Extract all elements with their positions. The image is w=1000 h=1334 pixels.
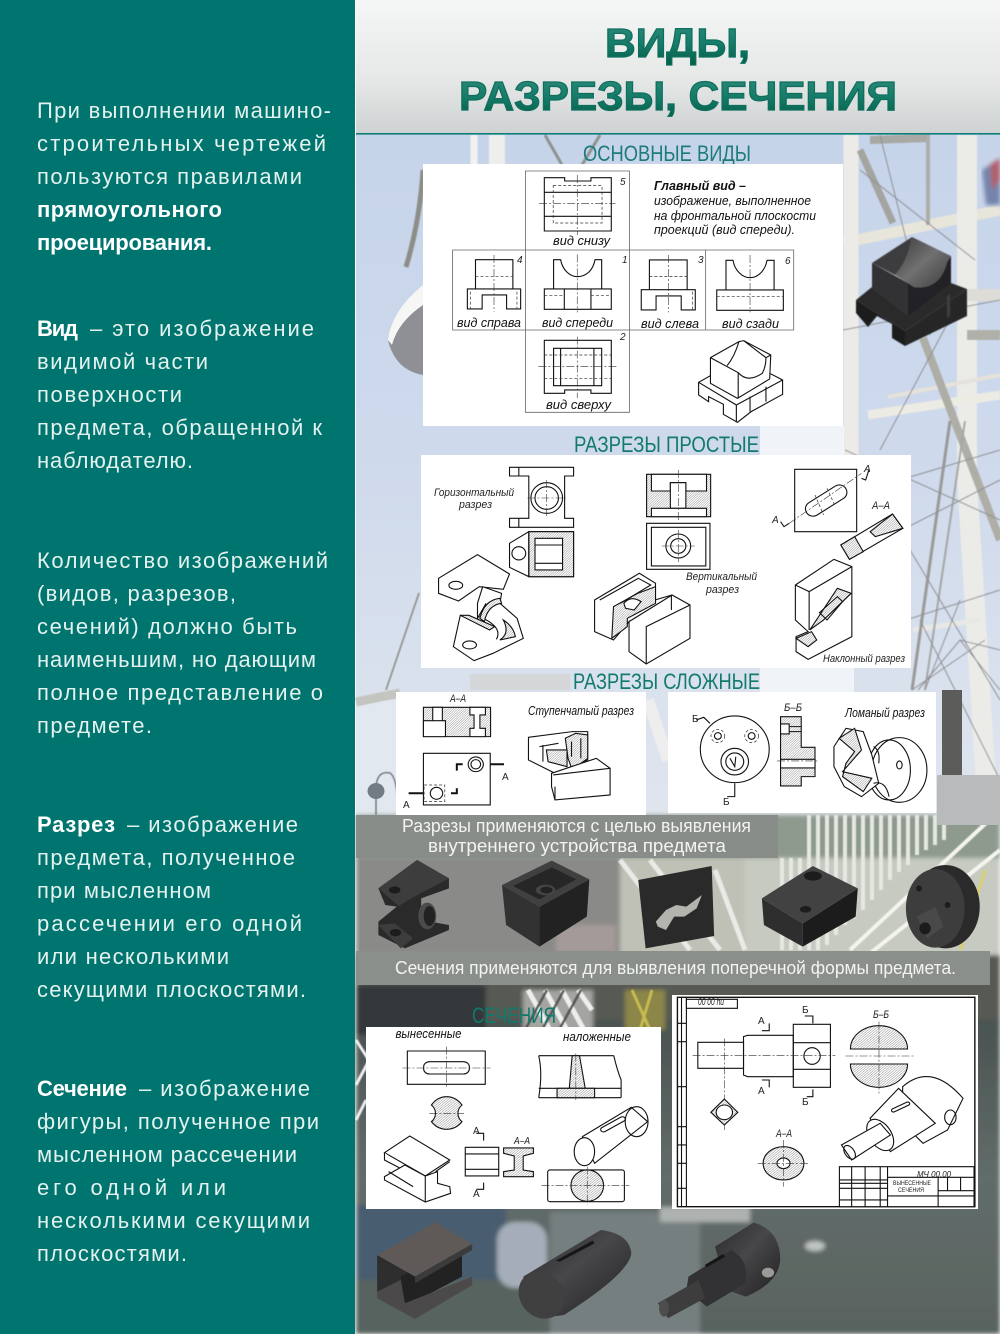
view labels: вид справа: [457, 316, 521, 330]
sidebar text: definition of cut: Разрез: [37, 812, 115, 837]
stepped cut captions: Ступенчатый разрез: [528, 704, 634, 718]
heading: main views: ОСНОВНЫЕ ВИДЫ: [583, 141, 751, 166]
cut captions: А–А: [871, 500, 890, 512]
callout: main view definition: Главный вид –: [654, 179, 746, 193]
sidebar text: definition of cut: рассечении его одной: [37, 911, 302, 936]
sidebar text: number of images: наименьшим, но дающим: [37, 647, 316, 672]
sheet captions: МЧ 00.00: [917, 1170, 952, 1179]
sidebar text: definition of view: – это изображение: [90, 316, 314, 341]
callout: main view definition: [654, 179, 816, 237]
caption bar: purpose of cuts: [356, 815, 778, 858]
icon: I-beam: [377, 1222, 472, 1319]
drawing: removed and overlaid sections: [384, 1047, 648, 1205]
broken cut captions: Б–Б: [784, 702, 802, 714]
icon: part 5: [906, 865, 980, 948]
title: [459, 20, 897, 119]
sidebar text: projection rule: пользуются правилами: [37, 164, 302, 189]
sidebar text: definition of view: поверхности: [37, 382, 182, 407]
cut captions: Горизонтальный: [434, 487, 514, 499]
sidebar text: definition of section: Сечение: [37, 1076, 127, 1101]
cut captions: [434, 464, 905, 665]
icon: stepped shaft: [658, 1223, 780, 1318]
view labels: вид снизу: [553, 234, 611, 248]
sheet captions: Б: [802, 1005, 809, 1016]
sheet captions: А–А: [775, 1128, 792, 1140]
sidebar text: projection rule: прямоугольного: [37, 197, 222, 222]
sheet captions: А: [758, 1086, 765, 1097]
sidebar text: definition of cut: или несколькими: [37, 944, 229, 969]
sidebar text: definition of view: [37, 316, 322, 473]
heading: simple cuts: РАЗРЕЗЫ ПРОСТЫЕ: [574, 432, 759, 457]
sidebar text: definition of section: плоскостями.: [37, 1241, 187, 1266]
sheet captions: А: [758, 1016, 765, 1027]
sidebar text: definition of section: – изображение: [139, 1076, 310, 1101]
sidebar text: number of images: Количество изображений: [37, 548, 328, 573]
view labels: вид сзади: [722, 317, 779, 331]
sidebar text: projection rule: При выполнении машино-: [37, 98, 331, 123]
sidebar text: definition of view: Вид: [37, 316, 78, 341]
icon: keyed cylinder: [512, 1230, 631, 1323]
callout: main view definition: проекций (вид спереди).: [654, 223, 795, 237]
heading: complex cuts: РАЗРЕЗЫ СЛОЖНЫЕ: [573, 669, 760, 694]
sidebar text: definition of view: предмета, обращенной к: [37, 415, 322, 440]
sidebar text: number of images: (видов, разрезов,: [37, 581, 236, 606]
sidebar text: projection rule: строительных чертежей: [37, 131, 326, 156]
caption bar: purpose of sections: [356, 951, 990, 985]
sidebar text: projection rule: [37, 98, 331, 255]
caption bar: purpose of cuts: Разрезы применяются с целью выявления: [402, 816, 751, 836]
cut captions: Вертикальный: [686, 571, 757, 583]
icon: part 2: [502, 861, 589, 947]
sidebar text: definition of cut: при мысленном: [37, 878, 211, 903]
sheet captions: СЕЧЕНИЯ: [898, 1188, 924, 1194]
view labels: вид сверху: [546, 398, 612, 412]
callout: main view definition: изображение, выполненное: [654, 194, 811, 208]
sidebar text: number of images: полное представление о: [37, 680, 323, 705]
sidebar text: number of images: сечений) должно быть: [37, 614, 297, 639]
section captions: А: [473, 1126, 480, 1137]
view labels: 5: [620, 177, 626, 188]
title: РАЗРЕЗЫ, СЕЧЕНИЯ: [459, 73, 897, 119]
icon: 3D saddle block: [856, 237, 967, 346]
cut captions: А: [863, 464, 871, 475]
icon: part 4: [762, 866, 858, 947]
stepped cut captions: А: [502, 772, 509, 783]
stepped cut captions: [403, 693, 634, 811]
view labels: [457, 177, 791, 412]
callout: main view definition: на фронтальной плоскости: [654, 209, 816, 223]
title: ВИДЫ,: [605, 20, 750, 66]
heading: sections: СЕЧЕНИЯ: [472, 1003, 556, 1028]
broken cut captions: Б: [723, 797, 730, 808]
view labels: 4: [517, 255, 523, 266]
section captions: наложенные: [563, 1030, 631, 1044]
drawing: simple cut views: [439, 467, 903, 664]
caption bar: purpose of cuts: внутреннего устройства предмета: [428, 836, 727, 856]
view labels: 2: [619, 332, 626, 343]
sidebar text: definition of section: мысленном рассечении: [37, 1142, 297, 1167]
icon: part 1: [378, 860, 449, 948]
cut captions: разрез: [458, 499, 492, 511]
icon: part 3: [638, 866, 714, 948]
stepped cut captions: А: [403, 800, 410, 811]
view labels: 1: [622, 255, 628, 266]
section captions: А–А: [513, 1136, 530, 1147]
sidebar text: definition of cut: [37, 812, 306, 1002]
section captions: вынесенные: [396, 1027, 462, 1041]
sidebar text: projection rule: проецирования.: [37, 230, 212, 255]
panel: technical drawing sheet: [672, 995, 978, 1209]
caption bar: purpose of sections: Сечения применяются для выявления поперечной формы предмета.: [395, 958, 956, 978]
broken cut captions: Б: [692, 714, 699, 725]
header band: [356, 0, 1000, 135]
sidebar text: definition of section: [37, 1076, 319, 1266]
sheet captions: Б–Б: [873, 1009, 889, 1021]
sidebar text: definition of section: несколькими секущими: [37, 1208, 310, 1233]
sidebar text: number of images: [37, 548, 328, 738]
cut captions: разрез: [705, 584, 739, 596]
panel: left sidebar: [0, 0, 355, 1334]
sidebar text: definition of view: видимой части: [37, 349, 208, 374]
panel: sections examples: [366, 1027, 661, 1209]
stepped cut captions: А–А: [449, 693, 466, 705]
sheet captions: 00 00 hи: [698, 997, 724, 1008]
sidebar text: definition of cut: предмета, полученное: [37, 845, 295, 870]
cut captions: А: [771, 515, 779, 526]
icons: bottom 3D parts: [377, 1222, 780, 1323]
sidebar text: definition of section: его одной или: [37, 1175, 226, 1200]
sheet captions: ВЫНЕСЕННЫЕ: [893, 1181, 931, 1187]
drawing: six orthographic views and isometric: [453, 171, 794, 422]
sidebar text: definition of section: фигуры, полученное при: [37, 1109, 319, 1134]
panel: simple cuts: [421, 455, 911, 668]
sidebar text: definition of cut: – изображение: [127, 812, 298, 837]
panel: stepped cut: [396, 692, 646, 815]
view labels: 3: [698, 255, 704, 266]
sheet captions: [698, 997, 952, 1194]
drawing: shaft with removed sections: [677, 997, 975, 1207]
drawing: broken cut: [696, 716, 927, 802]
background photo: ship masts and rigging: [356, 134, 1000, 1334]
view labels: вид спереди: [542, 316, 613, 330]
sidebar text: definition of view: наблюдателю.: [37, 448, 193, 473]
icons: 3D parts row: [378, 860, 980, 948]
cut captions: Наклонный разрез: [823, 653, 905, 665]
panel: broken cut: [668, 692, 936, 813]
sidebar text: number of images: предмете.: [37, 713, 152, 738]
section captions: А: [473, 1189, 480, 1200]
panel: main views: [423, 164, 843, 426]
broken cut captions: [692, 702, 925, 808]
section captions: [396, 1027, 631, 1200]
sidebar text: definition of cut: секущими плоскостями.: [37, 977, 306, 1002]
view labels: 6: [785, 256, 791, 267]
view labels: вид слева: [641, 317, 699, 331]
broken cut captions: Ломаный разрез: [844, 706, 925, 720]
sheet captions: Б: [802, 1097, 809, 1108]
drawing: stepped cut: [409, 707, 610, 805]
